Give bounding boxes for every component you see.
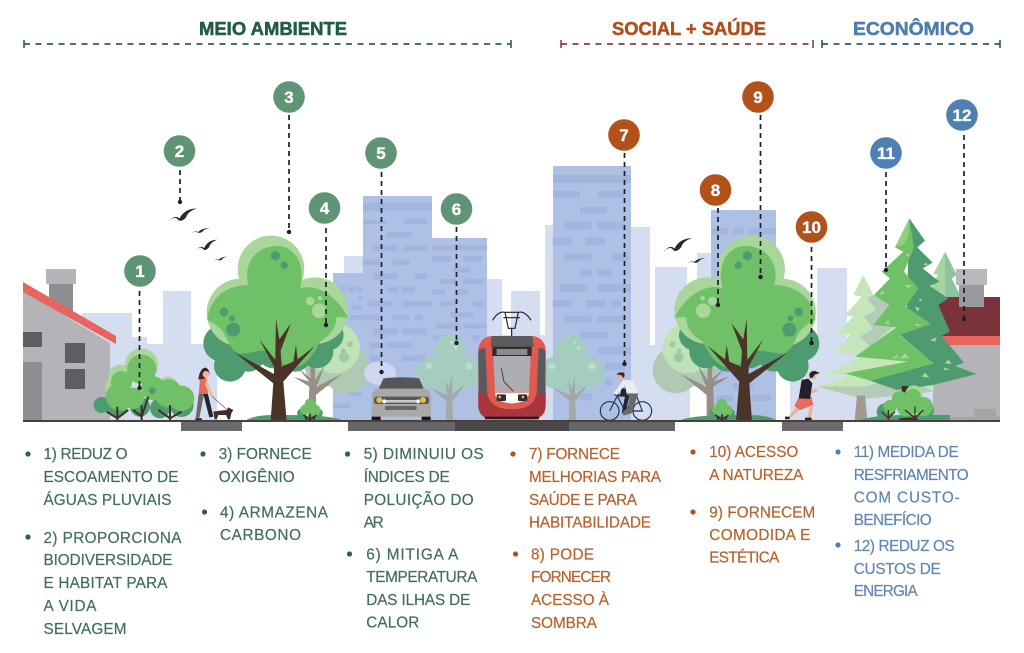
- badge 6: 6: [452, 200, 461, 219]
- list item 8: SOMBRA: [531, 615, 598, 632]
- badge 3: 3: [284, 88, 294, 107]
- list item 12: ENERGIA: [854, 583, 918, 600]
- small pale conifer: [932, 252, 962, 298]
- ground and sidewalks: [23, 420, 1000, 431]
- badge 10: 10: [802, 218, 821, 237]
- list item 12: CUSTOS DE: [854, 561, 941, 578]
- list item 10: A NATUREZA: [709, 467, 804, 484]
- leader line 1: [137, 291, 142, 390]
- list item 4: [202, 504, 329, 544]
- mid-blue buildings: [333, 166, 776, 421]
- badge 12: 12: [953, 106, 971, 125]
- leader line 8: [716, 208, 720, 307]
- list item 7: 7) FORNECE: [529, 446, 620, 463]
- list item 7: [510, 446, 662, 532]
- badge 2: 2: [175, 142, 184, 161]
- list item 2: BIODIVERSIDADE: [44, 552, 172, 569]
- list item 1: ESCOAMENTO DE: [44, 469, 178, 486]
- list item 7: MELHORIAS PARA: [529, 469, 662, 486]
- badge 4: [309, 192, 340, 224]
- list item 8: [513, 546, 611, 632]
- woman walking dog: [195, 368, 233, 420]
- leader line 12: [962, 135, 966, 321]
- badge 7: 7: [619, 126, 629, 145]
- list item 9: 9) FORNECEM: [709, 504, 815, 522]
- badge 5: [365, 137, 397, 169]
- list item 5: ÍNDICES DE: [364, 469, 450, 486]
- list item 6: DAS ILHAS DE: [366, 592, 470, 609]
- badge 7: [608, 119, 640, 151]
- runner: [785, 371, 820, 420]
- list item 8: FORNECER: [531, 569, 611, 586]
- list item 4: CARBONO: [220, 527, 301, 544]
- list item 10: [690, 444, 804, 484]
- list item 2: 2) PROPORCIONA: [44, 530, 182, 547]
- list item 3: OXIGÊNIO: [219, 469, 295, 486]
- big tree right: [674, 236, 819, 421]
- leader line 3: [287, 115, 291, 234]
- bush by right house: [857, 385, 950, 421]
- list item 4: 4) ARMAZENA: [220, 504, 329, 522]
- bush group 1: [94, 348, 194, 421]
- badge 9: 9: [753, 88, 763, 107]
- list item 9: [690, 504, 815, 566]
- list item 2: SELVAGEM: [44, 621, 126, 638]
- badge 11: 11: [877, 144, 895, 163]
- list item 3: [200, 446, 312, 486]
- leader line 5: [379, 172, 384, 374]
- left house: [23, 269, 116, 420]
- badge 1: [124, 255, 156, 287]
- small bush under tree: [297, 399, 323, 421]
- list item 8: 8) PODE: [531, 546, 594, 564]
- list item 12: 12) REDUZ OS: [854, 538, 955, 555]
- list item 12: [835, 538, 955, 600]
- small bush under right tree: [709, 399, 735, 421]
- badge 12: [946, 99, 978, 131]
- heading: economico: ECONÔMICO: [853, 18, 974, 39]
- list item 9: COMODIDA E: [709, 527, 810, 544]
- pale back tree right: [653, 323, 729, 421]
- badge 1: 1: [135, 262, 145, 281]
- heading: economico: [822, 18, 1000, 48]
- list item 5: [345, 446, 484, 532]
- badge 3: [273, 81, 305, 113]
- birds right: [662, 238, 706, 264]
- list item 6: [347, 546, 478, 632]
- list item 6: 6) MITIGA A: [366, 546, 459, 564]
- badge 5: 5: [376, 144, 386, 163]
- pale conifer: [817, 275, 933, 420]
- leader line 4: [324, 228, 328, 327]
- heading: social + saude: SOCIAL + SAÚDE: [612, 18, 766, 39]
- badge 2: [164, 135, 195, 167]
- leader line 9: [758, 115, 763, 279]
- list item 9: ESTÉTICA: [709, 550, 780, 566]
- list item 2: E HABITAT PARA: [44, 575, 168, 592]
- list item 11: [835, 444, 969, 529]
- list item 5: POLUIÇÃO DO: [364, 492, 474, 509]
- list item 8: ACESSO À: [531, 592, 610, 609]
- list item 2: A VIDA: [44, 598, 97, 615]
- list item 3: 3) FORNECE: [219, 446, 312, 463]
- list item 11: BENEFÍCIO: [854, 512, 932, 529]
- heading: social + saude: [561, 18, 813, 48]
- list item 2: [25, 530, 182, 638]
- leader line 7: [622, 153, 627, 366]
- pale street tree 1: [416, 335, 482, 421]
- badge 9: [742, 81, 774, 113]
- leader line 11: [884, 172, 888, 272]
- list item 1: ÁGUAS PLUVIAIS: [44, 492, 172, 509]
- leader line 10: [809, 247, 814, 345]
- badge 8: [700, 174, 731, 206]
- list item 5: AR: [364, 514, 384, 532]
- badge 11: [870, 137, 902, 169]
- list item 11: COM CUSTO-: [854, 490, 960, 506]
- badge 10: [796, 211, 827, 243]
- heading: meio ambiente: [24, 18, 511, 48]
- list item 1: 1) REDUZ O: [44, 446, 128, 463]
- large conifer: [845, 218, 977, 390]
- pale back tree left: [293, 323, 370, 421]
- big tree left: [203, 236, 348, 421]
- pale background skyline: [82, 225, 933, 421]
- badge 6: [441, 193, 472, 225]
- badge 4: 4: [320, 199, 330, 218]
- leader line 6: [454, 227, 459, 345]
- list item 10: 10) ACESSO: [709, 444, 798, 461]
- car: [364, 362, 431, 421]
- right house: [925, 269, 1000, 421]
- pale street tree 2: [539, 335, 605, 421]
- list item 6: TEMPERATURA: [366, 569, 478, 586]
- cyclist: [600, 372, 652, 420]
- tram: [478, 312, 546, 419]
- list item 6: CALOR: [366, 614, 419, 632]
- heading: meio ambiente: MEIO AMBIENTE: [199, 18, 347, 39]
- list item 7: HABITABILIDADE: [529, 514, 651, 532]
- list item 7: SAÚDE E PARA: [529, 492, 638, 509]
- list item 1: [25, 446, 179, 509]
- list item 5: 5) DIMINUIU OS: [364, 446, 484, 463]
- badge 8: 8: [711, 181, 720, 200]
- birds left: [167, 208, 228, 261]
- list item 11: 11) MEDIDA DE: [854, 444, 959, 461]
- list item 11: RESFRIAMENTO: [854, 467, 969, 484]
- leader line 2: [178, 170, 182, 204]
